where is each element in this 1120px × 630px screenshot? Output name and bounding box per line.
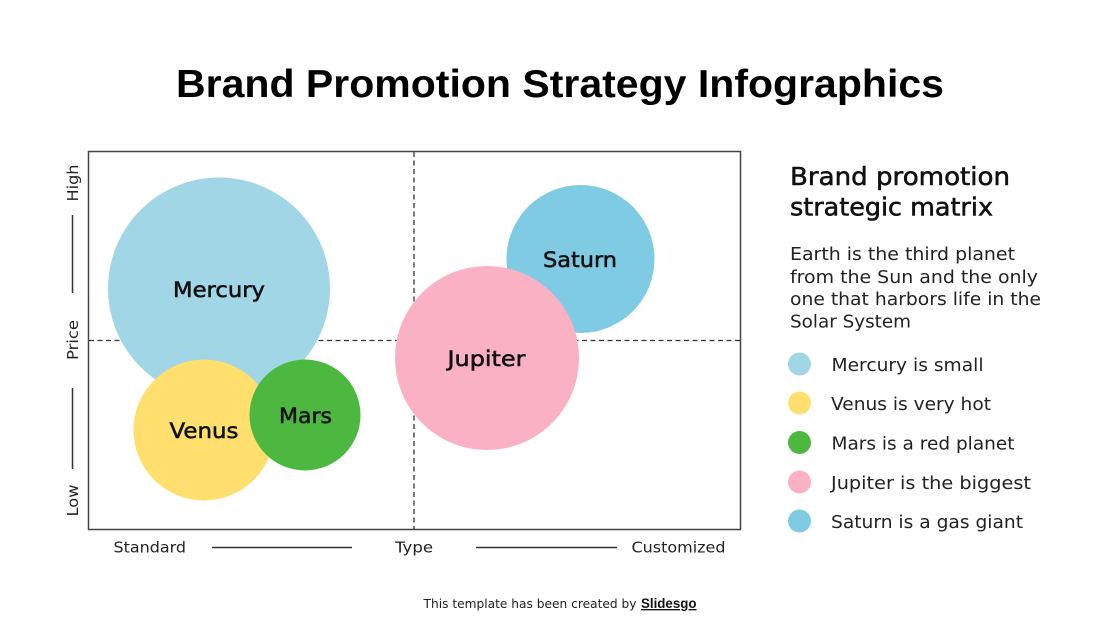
bubble: Mars: Mars	[279, 404, 332, 428]
legend item: Venus: Venus is very hot	[831, 394, 991, 415]
legend item: Saturn: Saturn is a gas giant	[831, 512, 1023, 533]
y axis: Price: Low	[64, 484, 82, 516]
bubble: Saturn: Saturn	[543, 248, 617, 272]
x axis: Type: Customized	[632, 538, 726, 556]
legend item: Mars: Mars is a red planet	[832, 434, 1014, 454]
bubble: Mars	[250, 360, 360, 470]
text block: description: from the Sun and the only	[790, 267, 1038, 288]
text block: description	[790, 244, 1041, 332]
bubble: Jupiter	[395, 266, 579, 450]
legend item: Mercury	[788, 352, 984, 376]
bubble: Mercury: Mercury	[173, 278, 265, 302]
text block: description: Solar System	[790, 312, 911, 332]
bubble: Mercury	[108, 178, 330, 400]
legend	[788, 352, 1031, 533]
y axis: Price: Price	[64, 320, 82, 360]
legend item: Jupiter	[788, 470, 1031, 494]
y axis: Price: High	[64, 165, 82, 202]
heading: matrix: strategic matrix	[790, 192, 993, 222]
text block: description: one that harbors life in the	[790, 289, 1041, 310]
legend item: Venus	[788, 392, 991, 415]
title: Brand Promotion Strategy Infographics	[176, 63, 944, 106]
x axis: Type	[114, 538, 726, 556]
footer credit: This template has been created by	[423, 596, 637, 611]
bubble: Venus	[134, 360, 274, 500]
bubble: Saturn	[506, 185, 654, 333]
bubble: Venus: Venus	[170, 419, 238, 443]
legend item: Jupiter: Jupiter is the biggest	[830, 473, 1031, 494]
x axis: Type: Type	[394, 538, 433, 556]
heading: matrix	[790, 162, 1010, 222]
legend item: Mercury: Mercury is small	[832, 355, 984, 376]
panel: matrix chart	[88, 152, 740, 530]
text block: description: Earth is the third planet	[790, 244, 1015, 265]
x axis: Type: Standard	[114, 538, 186, 556]
heading: matrix: Brand promotion	[790, 162, 1010, 191]
footer credit: Slidesgo	[641, 596, 696, 611]
bubble: Jupiter: Jupiter	[445, 347, 526, 371]
y axis: Price	[64, 164, 82, 516]
